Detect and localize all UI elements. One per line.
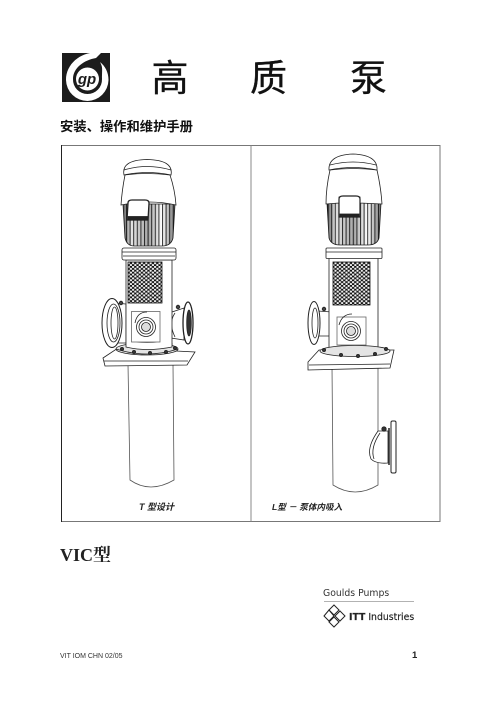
icon: ITT diamonds — [324, 605, 345, 627]
column — [329, 258, 378, 350]
pump: L type — [308, 154, 396, 492]
motor flange — [326, 248, 382, 258]
pump tube — [128, 364, 174, 487]
footer code: VIT IOM CHN 02/05 — [60, 653, 123, 660]
motor cap — [124, 160, 171, 175]
mesh guard — [333, 262, 370, 305]
motor fins — [123, 204, 175, 246]
title: 泵 — [350, 58, 387, 99]
column — [126, 260, 172, 349]
pump logo plate — [132, 312, 160, 342]
motor cowl — [121, 174, 176, 205]
left flange — [102, 298, 126, 348]
motor fins — [327, 203, 381, 245]
title: 高 — [152, 58, 188, 99]
subtitle: 安装、操作和维护手册 — [60, 118, 193, 134]
pump logo plate — [337, 314, 366, 345]
title — [152, 58, 387, 99]
motor cap — [329, 154, 377, 170]
bolted collar — [320, 346, 390, 358]
page number: 1 — [412, 650, 418, 661]
mesh guard — [128, 262, 162, 303]
brand: Goulds Pumps: Goulds Pumps — [323, 588, 389, 599]
caption: L type: L型 － 泵体内吸入 — [272, 502, 343, 512]
terminal box — [127, 200, 149, 220]
base plate — [103, 348, 195, 366]
logo: GP spiral: gp — [77, 71, 96, 88]
right flange — [167, 302, 193, 344]
base plate — [308, 350, 394, 370]
title: 质 — [250, 58, 287, 99]
figure frame — [62, 145, 440, 522]
model heading: VIC型 — [60, 545, 111, 565]
motor cowl — [326, 168, 382, 204]
side inlet flange — [370, 421, 396, 473]
pump: T type — [102, 160, 195, 487]
brand: ITT Industries: ITT Industries — [349, 612, 414, 623]
motor flange — [122, 248, 176, 260]
left flange — [308, 302, 332, 344]
logo: GP spiral — [62, 53, 110, 102]
terminal box — [339, 196, 360, 217]
pump tube — [332, 366, 378, 492]
caption: T type: T 型设计 — [139, 502, 175, 512]
bolted collar — [116, 343, 178, 355]
